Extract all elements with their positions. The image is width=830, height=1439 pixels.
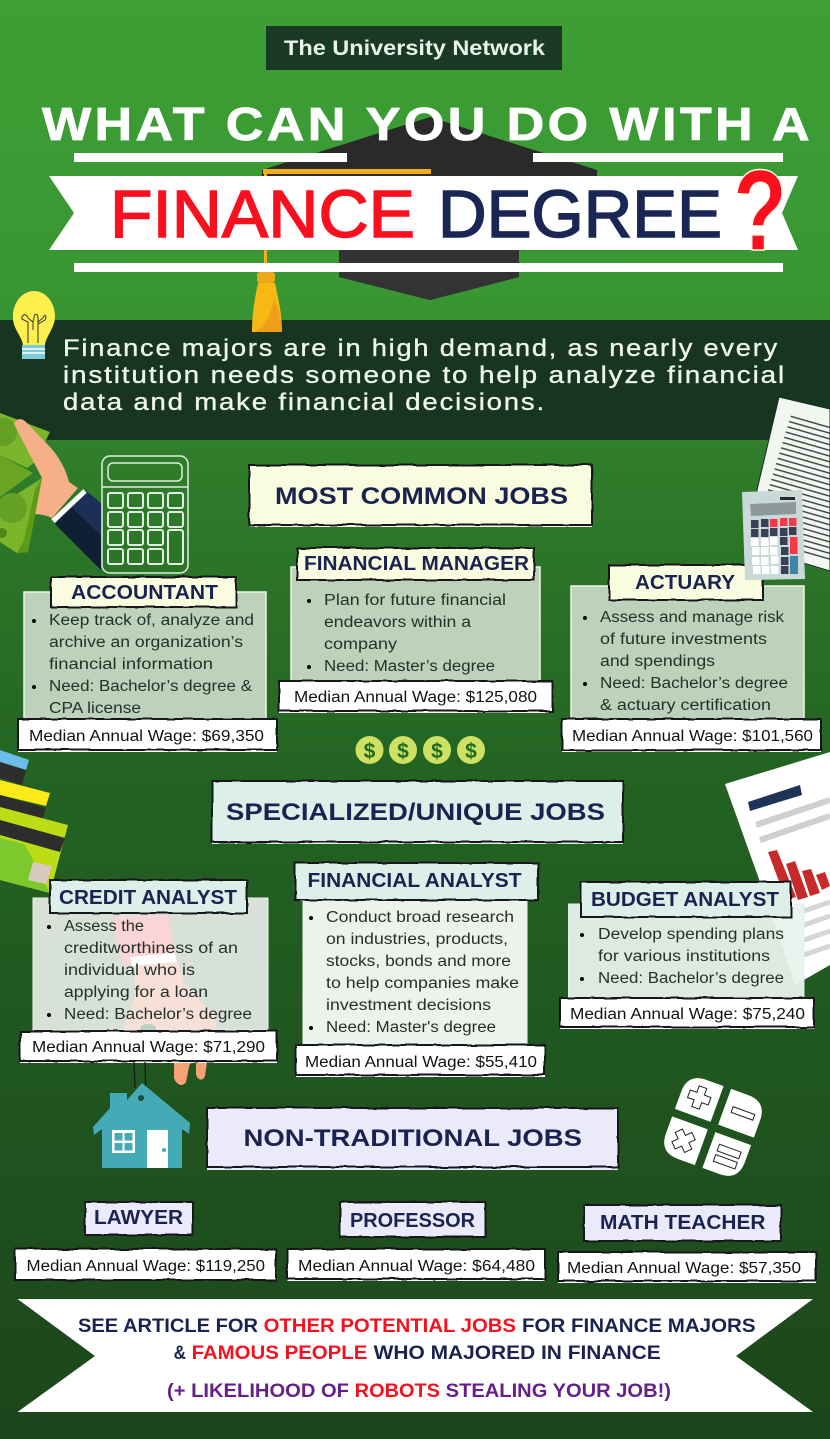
job title: budget analyst: BUDGET ANALYST (591, 889, 779, 911)
section heading: specialized/unique jobs (212, 781, 623, 844)
duties list: Need: Bachelor’s degree (598, 970, 784, 987)
wage: math teacher (558, 1252, 816, 1283)
job title: credit analyst: CREDIT ANALYST (59, 887, 237, 909)
bottom ribbon: call to action: (+ LIKELIHOOD OF (167, 1380, 349, 1402)
white rule: lower (74, 263, 783, 272)
duties list: for various institutions (598, 948, 770, 965)
job title: accountant: ACCOUNTANT (71, 582, 218, 604)
wage: credit analyst (20, 1031, 277, 1063)
duties list: investment decisions (326, 997, 491, 1014)
duties list: Plan for future financial (324, 592, 506, 609)
job title: financial analyst: FINANCIAL ANALYST (308, 870, 522, 892)
white rule: upper right (533, 153, 783, 162)
job title: financial manager (297, 548, 534, 580)
question mark: ? (733, 147, 787, 275)
header badge: The University Network (266, 26, 562, 70)
wage: professor: Median Annual Wage: $64,480 (298, 1258, 535, 1275)
panel: accountant (18, 577, 277, 752)
wage: lawyer (15, 1249, 276, 1280)
intro band: Finance majors are in high demand, as nearly every (63, 335, 779, 362)
section heading: specialized/unique jobs: SPECIALIZED/UNIQUE JOBS (226, 799, 605, 826)
job: lawyer (85, 1202, 193, 1235)
job: math teacher: MATH TEACHER (600, 1212, 766, 1234)
section heading: non-traditional jobs: NON-TRADITIONAL JOBS (244, 1125, 582, 1152)
duties list (32, 612, 254, 717)
intro band: institution needs someone to help analyze financial (63, 362, 786, 389)
duties list: financial information (49, 656, 213, 673)
icon: fingers below credit panel (172, 1062, 207, 1085)
icon: printed document top right (757, 397, 830, 571)
job: math teacher (584, 1205, 781, 1241)
duties list (309, 909, 519, 1036)
duties list: Need: Master’s degree (324, 658, 495, 675)
duties list: Assess and manage risk (600, 609, 784, 626)
icon: dollar coins: $ (397, 740, 409, 763)
wage: actuary (562, 719, 821, 752)
intro band: data and make financial decisions. (63, 389, 546, 416)
header badge: The University Network: The University Network (284, 37, 545, 60)
duties list: Need: Bachelor’s degree (600, 675, 788, 692)
duties list: endeavors within a (324, 614, 471, 631)
duties list: and spendings (600, 653, 715, 670)
job title: financial analyst (295, 863, 538, 901)
wage: budget analyst: Median Annual Wage: $75,240 (570, 1006, 805, 1023)
duties list: on industries, products, (326, 931, 508, 948)
duties list: Keep track of, analyze and (49, 612, 254, 629)
icon: graduation cap (262, 117, 597, 300)
duties list (307, 592, 506, 675)
duties list: Conduct broad research (326, 909, 514, 926)
duties list: archive an organization’s (49, 634, 243, 651)
bottom ribbon: call to action: STEALING YOUR JOB!) (446, 1380, 671, 1402)
icon: dollar coins: $ (431, 740, 443, 763)
wage: lawyer: Median Annual Wage: $119,250 (26, 1258, 265, 1275)
duties list: to help companies make (326, 975, 519, 992)
duties list: of future investments (600, 631, 767, 648)
panel: budget analyst (560, 882, 814, 1029)
job title: accountant (51, 577, 236, 607)
job title: actuary: ACTUARY (635, 572, 736, 594)
icon: hand holding cash (0, 413, 101, 570)
bottom ribbon: call to action (18, 1299, 813, 1412)
icon: desk calculator (742, 490, 805, 580)
job: lawyer: LAWYER (94, 1207, 184, 1229)
icon: light bulb (13, 291, 55, 359)
intro band (0, 320, 830, 440)
bottom ribbon: call to action: FOR FINANCE MAJORS (522, 1315, 756, 1337)
title line: what can you do with a: WHAT CAN YOU DO WITH A (42, 98, 813, 150)
duties list: Develop spending plans (598, 926, 784, 943)
wage: credit analyst: Median Annual Wage: $71,290 (32, 1039, 265, 1056)
job title: actuary (609, 565, 763, 600)
wage: professor (288, 1249, 545, 1281)
icon: hand showing through panel (112, 915, 217, 1034)
duties list: Need: Bachelor’s degree (64, 1006, 252, 1023)
job: professor (340, 1202, 486, 1237)
title ribbon: finance degree: FINANCE (110, 177, 415, 252)
icon: dollar coins: $ (364, 740, 376, 763)
wage: accountant (18, 719, 277, 752)
duties list: stocks, bonds and more (326, 953, 511, 970)
icon: tassel (252, 272, 282, 332)
panel: financial analyst (295, 863, 545, 1077)
duties list: Assess the (64, 918, 144, 935)
panel: financial manager (279, 548, 552, 713)
duties list: Need: Bachelor’s degree & (49, 678, 253, 695)
icon: credit cards (0, 750, 68, 893)
bottom ribbon: call to action: ROBOTS (355, 1380, 440, 1402)
icon: report with bar chart (725, 752, 830, 985)
wage: financial analyst: Median Annual Wage: $55,410 (305, 1054, 537, 1071)
duties list (580, 926, 784, 987)
duties list: Need: Master's degree (326, 1019, 496, 1036)
icon: house on a tag (93, 1062, 190, 1168)
duties list: CPA license (49, 700, 141, 717)
duties list: & actuary certification (600, 697, 771, 714)
wage: math teacher: Median Annual Wage: $57,350 (567, 1260, 801, 1277)
job title: credit analyst (50, 880, 247, 913)
bottom ribbon: call to action: SEE ARTICLE FOR (78, 1315, 258, 1337)
wage: budget analyst (560, 998, 814, 1029)
icon: math operator keys (659, 1073, 767, 1181)
icon: outlined calculator (102, 456, 188, 573)
wage: financial manager (279, 681, 552, 713)
wage: financial manager: Median Annual Wage: $125,080 (294, 689, 537, 706)
job: professor: PROFESSOR (350, 1210, 476, 1232)
section heading: non-traditional jobs (207, 1108, 618, 1170)
white rule: upper left (74, 153, 347, 162)
icon: dollar coins (356, 736, 485, 764)
wage: accountant: Median Annual Wage: $69,350 (29, 728, 264, 745)
title ribbon: finance degree: DEGREE (438, 177, 722, 252)
bottom ribbon: call to action: OTHER POTENTIAL JOBS (264, 1315, 516, 1337)
job title: financial manager: FINANCIAL MANAGER (304, 553, 530, 575)
bottom ribbon: call to action: WHO MAJORED IN FINANCE (374, 1342, 661, 1364)
duties list: creditworthiness of an (64, 940, 238, 957)
wage: actuary: Median Annual Wage: $101,560 (572, 728, 813, 745)
duties list: individual who is (64, 962, 195, 979)
bottom ribbon: call to action: & (174, 1342, 186, 1364)
section heading: most common jobs: MOST COMMON JOBS (275, 483, 568, 510)
panel: credit analyst (20, 880, 277, 1063)
title ribbon: finance degree (49, 176, 798, 252)
section heading: most common jobs (249, 465, 592, 527)
duties list: company (324, 636, 397, 653)
duties list (583, 609, 788, 714)
panel: actuary (562, 565, 821, 752)
icon: dollar coins: $ (465, 740, 477, 763)
job title: budget analyst (581, 882, 791, 917)
duties list (47, 918, 252, 1023)
wage: financial analyst (296, 1045, 545, 1077)
duties list: applying for a loan (64, 984, 208, 1001)
bottom ribbon: call to action: FAMOUS PEOPLE (192, 1342, 367, 1364)
